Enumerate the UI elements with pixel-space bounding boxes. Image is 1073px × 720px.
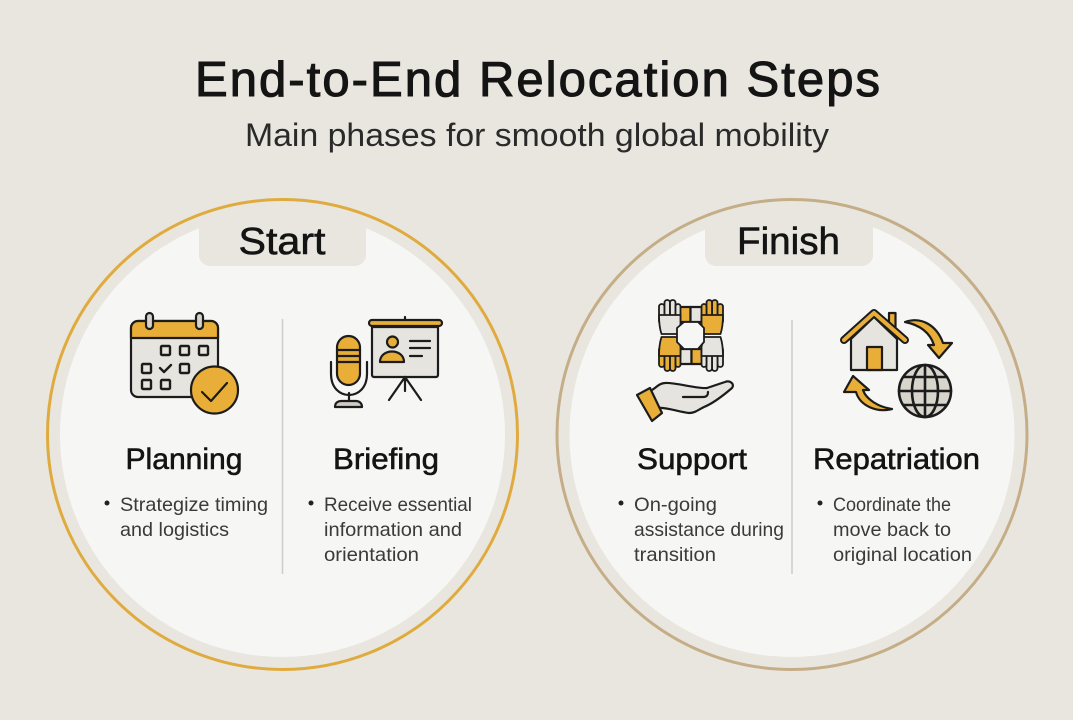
icon: joined hands above open hand bbox=[637, 300, 733, 421]
finish tab bbox=[705, 210, 873, 266]
briefing column: orientation bbox=[324, 544, 419, 566]
planning column bbox=[104, 443, 268, 541]
repatriation column: original location bbox=[833, 544, 972, 566]
support column: assistance during bbox=[634, 519, 784, 541]
briefing column: information and bbox=[324, 519, 462, 541]
repatriation column: move back to bbox=[833, 519, 951, 541]
divider bbox=[282, 319, 284, 574]
upper clasped hands bbox=[659, 300, 723, 371]
icon: home, arrows and globe bbox=[844, 313, 952, 417]
planning column: and logistics bbox=[120, 519, 229, 541]
title: End-to-End Relocation Steps bbox=[195, 53, 880, 107]
panel: start bbox=[48, 200, 518, 670]
finish tab: Finish bbox=[737, 221, 840, 263]
subtitle: Main phases for smooth global mobility bbox=[245, 117, 829, 153]
briefing column: Briefing bbox=[333, 443, 439, 476]
support column bbox=[618, 443, 784, 566]
icon: calendar with check bbox=[131, 313, 238, 414]
open hand bbox=[650, 381, 733, 413]
support column: Support bbox=[637, 443, 748, 476]
planning column: Strategize timing bbox=[120, 494, 268, 516]
planning column: Planning bbox=[126, 443, 242, 476]
start tab: Start bbox=[238, 221, 326, 263]
support column: transition bbox=[634, 544, 716, 566]
panel: finish bbox=[557, 200, 1027, 670]
repatriation column: Coordinate the bbox=[833, 494, 951, 516]
start tab bbox=[199, 210, 366, 266]
repatriation column bbox=[813, 443, 980, 566]
briefing column bbox=[308, 443, 472, 566]
repatriation column: Repatriation bbox=[813, 443, 980, 476]
icon: microphone and presentation board bbox=[331, 317, 442, 407]
briefing column: Receive essential bbox=[324, 494, 472, 516]
support column: On-going bbox=[634, 494, 717, 516]
divider bbox=[791, 320, 793, 574]
